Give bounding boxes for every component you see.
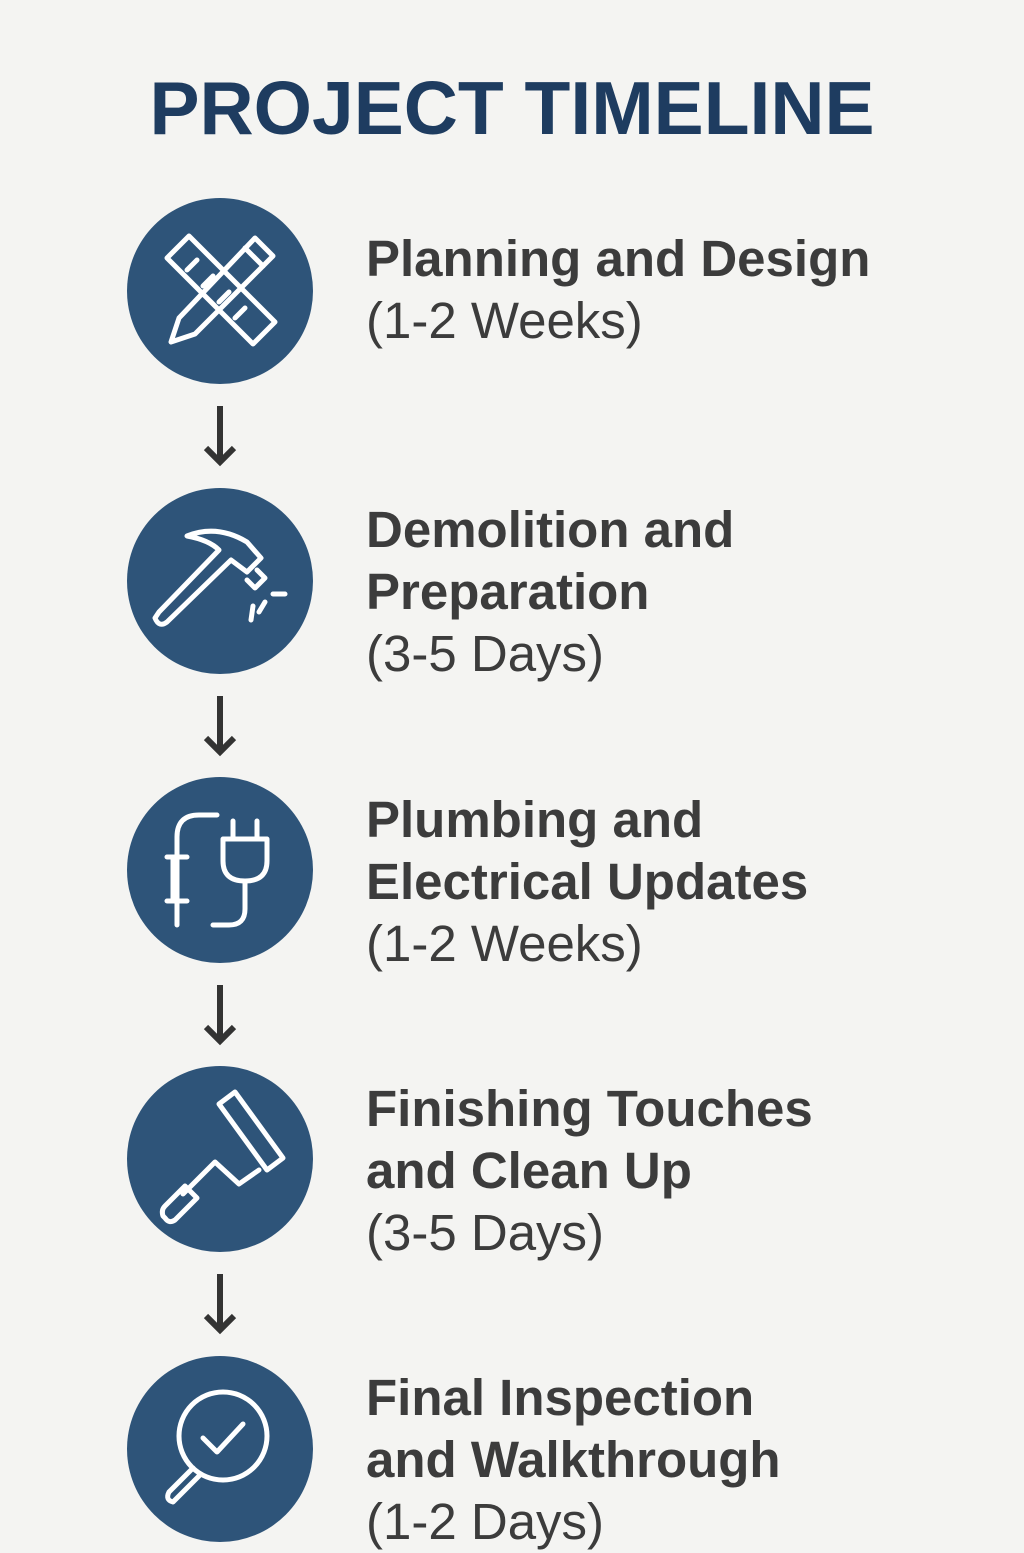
icon: paint roller [127, 1066, 313, 1252]
text: demolition: Preparation [366, 563, 649, 620]
icon: magnifier check [127, 1356, 313, 1542]
icon: pipe and plug [127, 777, 313, 963]
title: PROJECT TIMELINE [149, 66, 875, 150]
text: planning: (1-2 Weeks) [366, 292, 643, 349]
icon: pencil and ruler [127, 198, 313, 384]
text: plumbing [366, 791, 808, 972]
text: plumbing: Plumbing and [366, 791, 703, 848]
arrow [204, 985, 236, 1046]
arrow [204, 406, 236, 466]
text: final inspection: Final Inspection [366, 1369, 754, 1426]
text: finishing [366, 1080, 813, 1261]
text: planning: Planning and Design [366, 230, 870, 287]
arrow [204, 1274, 236, 1334]
text: demolition: Demolition and [366, 501, 734, 558]
text: finishing: and Clean Up [366, 1142, 692, 1199]
text: final inspection: and Walkthrough [366, 1431, 781, 1488]
text: plumbing: Electrical Updates [366, 853, 808, 910]
arrow [204, 696, 236, 756]
text: finishing: Finishing Touches [366, 1080, 813, 1137]
text: demolition [366, 501, 734, 682]
icon: hammer [127, 488, 313, 674]
text: finishing: (3-5 Days) [366, 1204, 604, 1261]
text: demolition: (3-5 Days) [366, 625, 604, 682]
text: planning [366, 230, 870, 349]
text: final inspection [366, 1369, 781, 1550]
text: plumbing: (1-2 Weeks) [366, 915, 643, 972]
text: final inspection: (1-2 Days) [366, 1493, 604, 1550]
